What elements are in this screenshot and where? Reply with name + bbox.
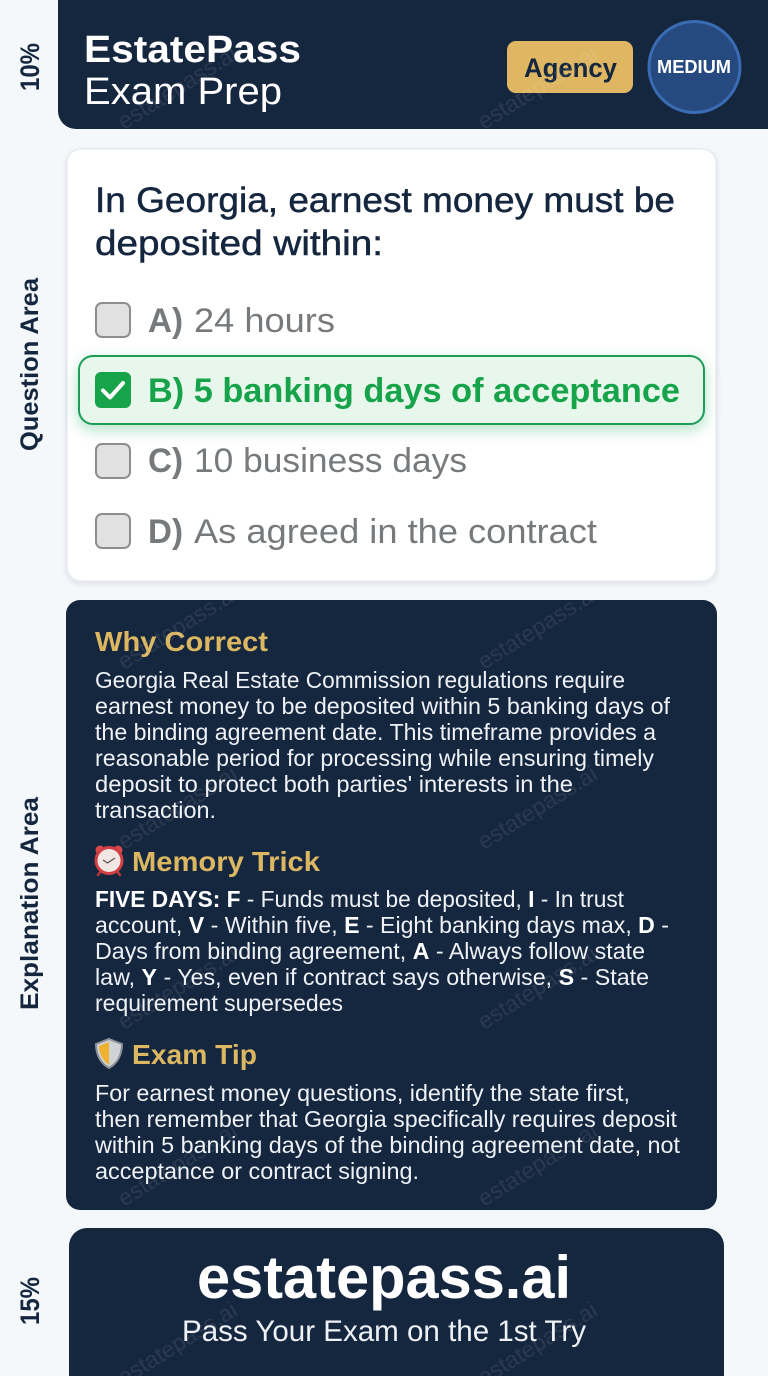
header title: EstatePass bbox=[84, 29, 301, 71]
text: memory trick body: requirement supersedes bbox=[95, 990, 343, 1016]
text: memory trick body: law, Y - Yes, even if contract says otherwise, S - State bbox=[95, 964, 649, 990]
text: why correct body: Georgia Real Estate Commission regulations require bbox=[95, 667, 625, 693]
watermarks: estatepass.ai bbox=[113, 580, 242, 674]
text: exam tip body: For earnest money questions, identify the state first, bbox=[95, 1080, 630, 1106]
question text: deposited within: bbox=[95, 224, 383, 263]
watermarks: estatepass.ai bbox=[113, 1117, 242, 1211]
watermarks: estatepass.ai bbox=[473, 40, 602, 134]
header title: Exam Prep bbox=[84, 71, 282, 113]
side label: Explanation Area: Explanation Area bbox=[16, 796, 44, 1010]
option D: As agreed in the contract bbox=[194, 513, 598, 551]
text: exam tip body: acceptance or contract signing. bbox=[95, 1158, 419, 1184]
badge: Medium bbox=[649, 22, 740, 112]
header title bbox=[84, 29, 301, 113]
icon: shield bbox=[96, 1039, 122, 1068]
watermarks: estatepass.ai bbox=[113, 940, 242, 1034]
text: exam tip body: within 5 banking days of the binding agreement date, not bbox=[94, 1132, 681, 1158]
option A: A) bbox=[148, 302, 183, 340]
option C: C) bbox=[148, 442, 183, 480]
text: memory trick body bbox=[95, 886, 669, 1016]
watermarks bbox=[113, 40, 602, 1376]
footer tagline: Pass Your Exam on the 1st Try bbox=[182, 1315, 586, 1348]
text: why correct body: deposit to protect both parties' interests in the bbox=[95, 771, 573, 797]
watermarks: estatepass.ai bbox=[113, 760, 242, 854]
text: exam tip body: then remember that Georgia specifically requires deposit bbox=[95, 1106, 678, 1132]
text: why correct body: the binding agreement date. This timeframe provides a bbox=[95, 719, 656, 745]
footer brand: estatepass.ai bbox=[197, 1244, 571, 1311]
badge: Agency bbox=[507, 41, 633, 93]
question text: In Georgia, earnest money must be bbox=[95, 181, 675, 220]
text: memory trick body: FIVE DAYS: F - Funds must be deposited, I - In trust bbox=[95, 886, 625, 912]
option A: 24 hours bbox=[194, 302, 335, 340]
icon: alarm clock bbox=[96, 846, 122, 875]
heading: Memory Trick: Memory Trick bbox=[132, 846, 320, 877]
side label: 10%: 10% bbox=[15, 43, 45, 91]
option D: D) bbox=[148, 513, 183, 551]
option B: correct answer bbox=[79, 356, 704, 424]
side label: Question Area: Question Area bbox=[16, 277, 44, 451]
badge: Agency: Agency bbox=[524, 53, 617, 83]
text: memory trick body: Days from binding agreement, A - Always follow state bbox=[95, 938, 645, 964]
watermarks: estatepass.ai bbox=[473, 760, 602, 854]
text: why correct body: reasonable period for processing while ensuring timely bbox=[95, 745, 654, 771]
panel: footer bbox=[69, 1228, 724, 1376]
watermarks: estatepass.ai bbox=[113, 40, 242, 134]
panel: explanation bbox=[66, 600, 717, 1210]
watermarks: estatepass.ai bbox=[473, 940, 602, 1034]
watermarks: estatepass.ai bbox=[473, 580, 602, 674]
text: why correct body: transaction. bbox=[95, 797, 216, 823]
panel: question card bbox=[67, 149, 716, 581]
option C: 10 business days bbox=[194, 442, 467, 480]
text: exam tip body bbox=[94, 1080, 681, 1184]
text: memory trick body: account, V - Within five, E - Eight banking days max, D - bbox=[95, 912, 669, 938]
question text bbox=[95, 181, 675, 263]
watermarks: estatepass.ai bbox=[473, 1117, 602, 1211]
heading: Why Correct: Why Correct bbox=[95, 626, 268, 657]
side label: 15%: 15% bbox=[15, 1277, 45, 1325]
option A bbox=[96, 302, 335, 340]
option B: correct answer: B) 5 banking days of acceptance bbox=[148, 372, 680, 410]
heading: Exam Tip: Exam Tip bbox=[132, 1039, 257, 1070]
panel: header bbox=[58, 0, 768, 129]
badge: Medium: MEDIUM bbox=[657, 57, 731, 77]
text: why correct body bbox=[95, 667, 671, 823]
text: why correct body: earnest money to be deposited within 5 banking days of bbox=[95, 693, 671, 719]
